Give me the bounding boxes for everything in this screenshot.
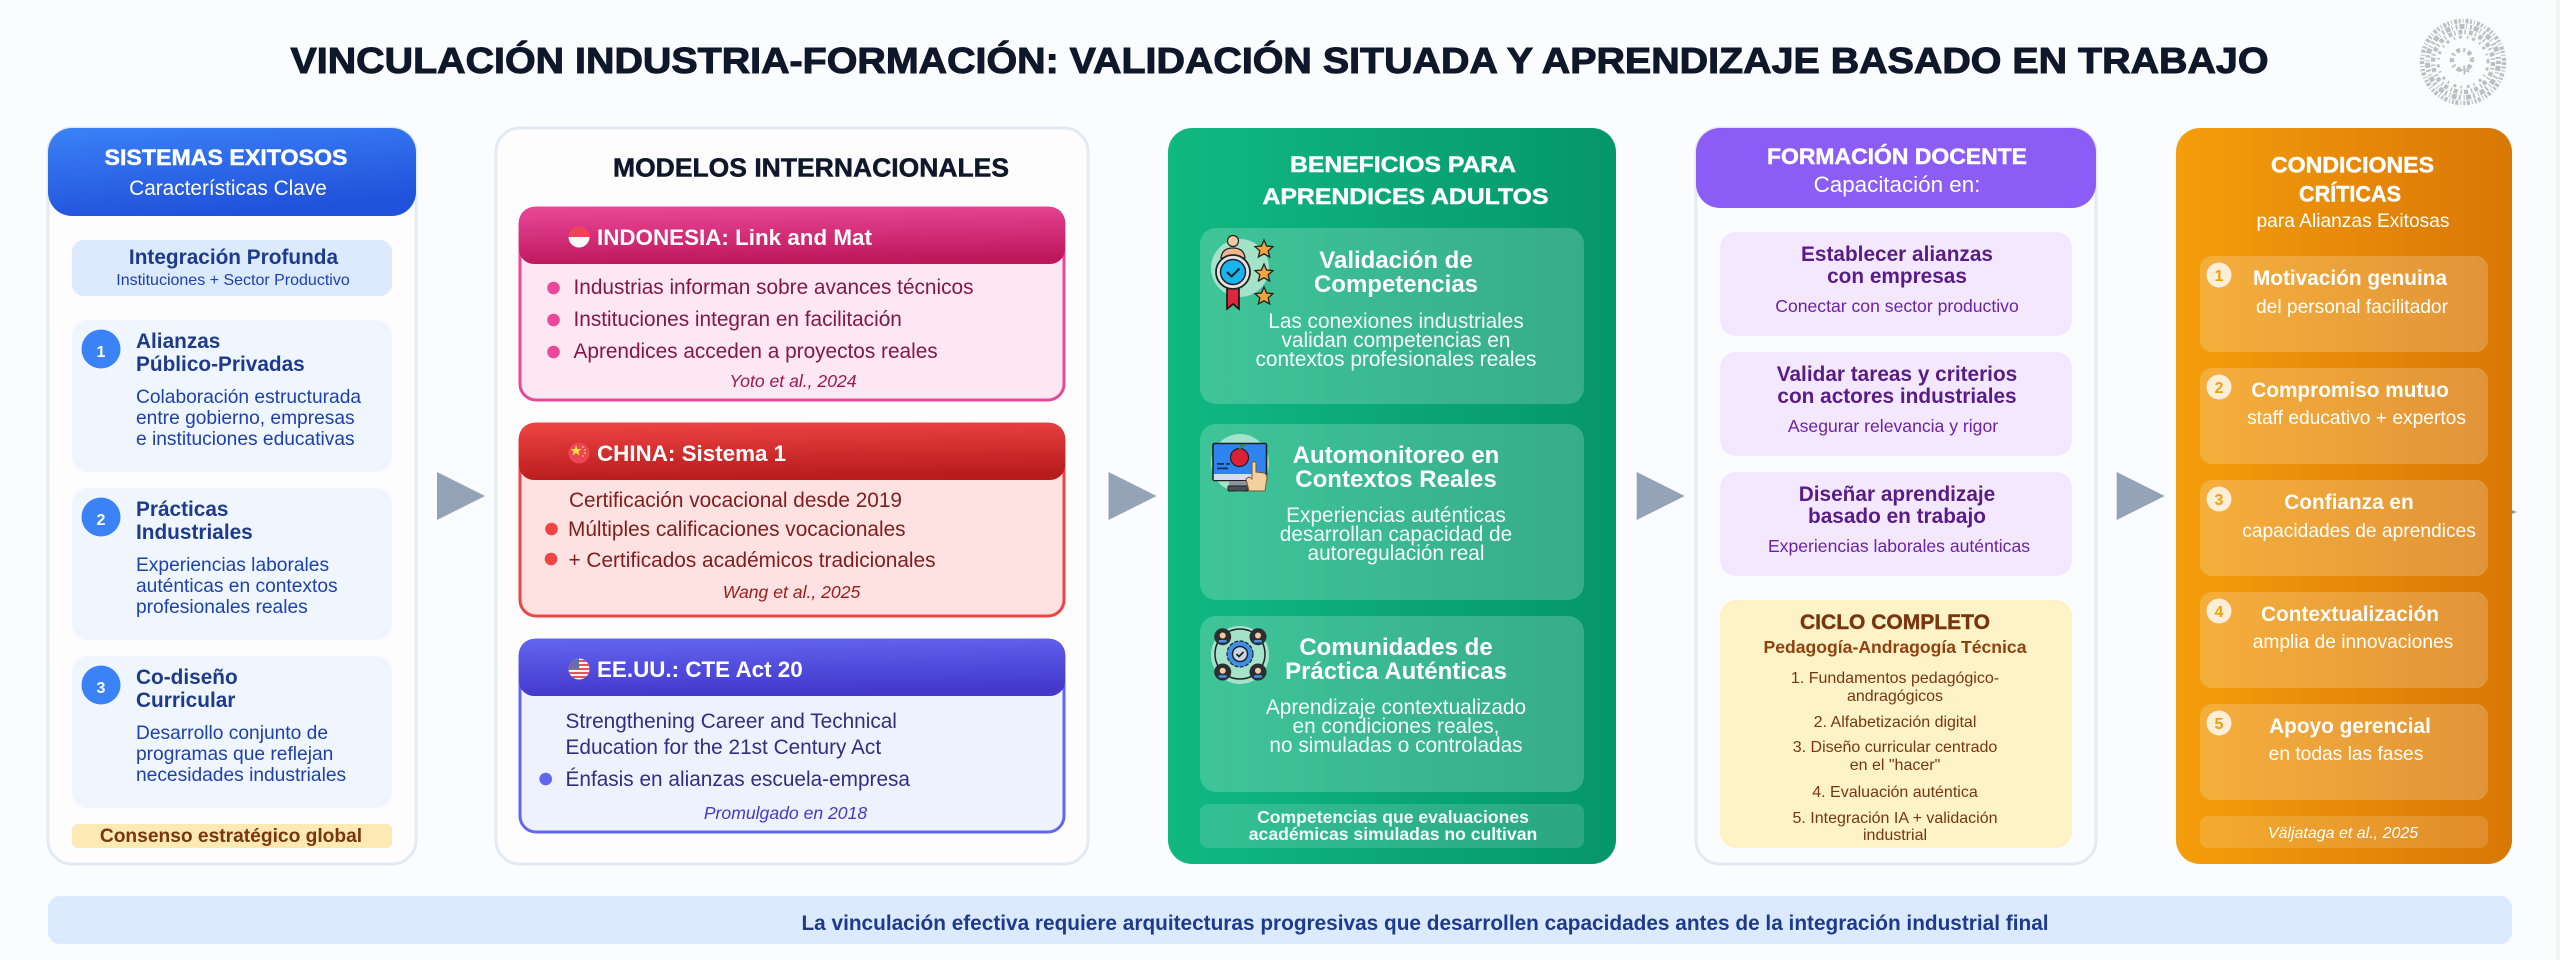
condition 5: Apoyo gerencial: [2269, 715, 2431, 738]
panel: modelos internacionales: [496, 128, 1088, 864]
card: validación: [1200, 228, 1584, 404]
note: competencias: Competencias que evaluaciones: [1257, 807, 1529, 827]
card: ciclo completo: industrial: [1863, 827, 1927, 844]
card: co-diseño: Co-diseño: [136, 666, 238, 689]
card: validar tareas: Asegurar relevancia y rigor: [1788, 416, 1998, 436]
panel header: Capacitación en:: [1814, 172, 1980, 197]
card: eeuu: [519, 639, 1065, 832]
card: automonitoreo: Automonitoreo en: [1293, 442, 1499, 469]
condition 3: capacidades de aprendices: [2242, 521, 2476, 542]
card: china: + Certificados académicos tradicionales: [568, 549, 936, 572]
card: ciclo completo: [1720, 600, 2072, 848]
heading: CRÍTICAS: [2299, 182, 2401, 206]
integración profunda: Integración Profunda: [129, 246, 339, 269]
card: validar tareas: con actores industriales: [1777, 385, 2017, 408]
card: china: Múltiples calificaciones vocacionales: [568, 518, 906, 541]
card: co-diseño: necesidades industriales: [136, 765, 346, 786]
card: alianzas: [72, 320, 392, 472]
card: validación: Validación de: [1319, 247, 1473, 274]
flag: usa: [568, 658, 590, 680]
footer banner: [48, 896, 2512, 944]
condition 1: 1: [2215, 268, 2224, 285]
panel header: SISTEMAS EXITOSOS: [104, 145, 348, 170]
heading: [1262, 152, 1549, 209]
card: validación: Las conexiones industriales: [1268, 310, 1524, 333]
card: validación: validan competencias en: [1282, 329, 1510, 352]
card: diseñar aprendizaje: [1720, 472, 2072, 576]
card: automonitoreo: Experiencias auténticas: [1286, 504, 1506, 527]
card: indonesia: Yoto et al., 2024: [729, 371, 857, 391]
flag: china: [568, 442, 590, 464]
card: alianzas: Colaboración estructurada: [136, 387, 361, 408]
card: validar tareas: [1720, 352, 2072, 456]
panel header: [1696, 128, 2096, 208]
title: VINCULACIÓN INDUSTRIA-FORMACIÓN: VALIDACIÓN SITUADA Y APRENDIZAJE BASADO EN TRABAJO: [290, 39, 2268, 81]
panel: beneficios: [1168, 128, 1616, 864]
card: comunidades: en condiciones reales,: [1293, 715, 1499, 738]
card: comunidades: no simuladas o controladas: [1269, 734, 1523, 757]
card: china: [519, 423, 1065, 616]
card: validación: Competencias: [1314, 271, 1478, 298]
card: automonitoreo: Contextos Reales: [1295, 466, 1497, 493]
condition 3: Confianza en: [2284, 491, 2414, 514]
condition 4: amplia de innovaciones: [2253, 632, 2453, 653]
panel: formación docente: [1696, 128, 2096, 864]
heading: para Alianzas Exitosas: [2256, 211, 2450, 232]
panel: sistemas exitosos: [48, 128, 416, 864]
card: eeuu: Énfasis en alianzas escuela-empresa: [566, 768, 910, 791]
icon: monitor with apple: [1211, 434, 1269, 492]
card: prácticas: profesionales reales: [136, 597, 308, 618]
condition 4: Contextualización: [2261, 603, 2439, 626]
consenso: Consenso estratégico global: [100, 826, 362, 847]
card: diseñar aprendizaje: Experiencias laborales auténticas: [1768, 536, 2030, 556]
card: alianzas: Alianzas: [136, 330, 220, 353]
card: automonitoreo: [1200, 424, 1584, 600]
card: china: CHINA: Sistema 1: [597, 441, 786, 466]
card: ciclo completo: en el "hacer": [1850, 757, 1940, 774]
card: prácticas: Prácticas: [136, 498, 228, 521]
card: ciclo completo: 1. Fundamentos pedagógico-: [1791, 670, 1999, 687]
condition 1: [2200, 256, 2488, 352]
card: indonesia: Instituciones integran en facilitación: [574, 308, 902, 331]
condition 3: 3: [2215, 492, 2224, 509]
card: prácticas: auténticas en contextos: [136, 576, 338, 597]
panel header: Características Clave: [129, 177, 327, 200]
card: ciclo completo: 4. Evaluación auténtica: [1812, 784, 1978, 801]
note: competencias: [1200, 804, 1584, 848]
card: validar tareas: Validar tareas y criterios: [1777, 363, 2017, 386]
card: alianzas: 1: [97, 344, 106, 361]
heading: [2256, 152, 2450, 232]
integración profunda: Instituciones + Sector Productivo: [116, 272, 350, 289]
panel header: [48, 128, 416, 216]
panel: condiciones críticas: [2176, 128, 2512, 864]
card: eeuu: Promulgado en 2018: [704, 803, 867, 823]
card: indonesia: INDONESIA: Link and Mat: [597, 225, 872, 250]
condition 3: [2200, 480, 2488, 576]
card: comunidades: Aprendizaje contextualizado: [1266, 696, 1526, 719]
card: eeuu: Strengthening Career and Technical: [566, 710, 897, 733]
card: ciclo completo: andragógicos: [1847, 688, 1943, 705]
card: prácticas: [72, 488, 392, 640]
card: diseñar aprendizaje: basado en trabajo: [1808, 505, 1986, 528]
condition 5: 5: [2215, 716, 2224, 733]
condition 5: en todas las fases: [2269, 744, 2423, 765]
card: eeuu: EE.UU.: CTE Act 20: [597, 657, 803, 682]
citation: [2200, 816, 2488, 848]
condition 2: [2200, 368, 2488, 464]
card: alianzas: e instituciones educativas: [136, 429, 355, 450]
card: prácticas: 2: [97, 512, 106, 529]
card: ciclo completo: 5. Integración IA + validación: [1792, 810, 1998, 827]
condition 2: Compromiso mutuo: [2251, 379, 2449, 402]
card: prácticas: Industriales: [136, 521, 253, 544]
condition 2: 2: [2215, 380, 2224, 397]
citation: Väljataga et al., 2025: [2268, 825, 2418, 842]
card: indonesia: Aprendices acceden a proyectos reales: [574, 340, 938, 363]
footer banner: La vinculación efectiva requiere arquitecturas progresivas que desarrollen capacidades antes de la integración industrial final: [801, 912, 2049, 935]
card: alianzas con empresas: Conectar con sector productivo: [1775, 296, 2019, 316]
card: validación: contextos profesionales reales: [1256, 348, 1536, 371]
card: indonesia: Industrias informan sobre avances técnicos: [574, 276, 973, 299]
condition 4: [2200, 592, 2488, 688]
condition 2: staff educativo + expertos: [2247, 408, 2466, 429]
arrow 4: [2117, 472, 2165, 520]
card: china: Wang et al., 2025: [723, 582, 861, 602]
card: co-diseño: [72, 656, 392, 808]
card: alianzas: Público-Privadas: [136, 353, 305, 376]
card: alianzas con empresas: Establecer alianzas: [1801, 243, 1993, 266]
card: ciclo completo: 2. Alfabetización digital: [1814, 714, 1976, 731]
card: indonesia: [519, 207, 1065, 400]
card: co-diseño: Curricular: [136, 689, 235, 712]
card: alianzas con empresas: [1720, 232, 2072, 336]
icon: watermark seal: [2422, 21, 2504, 103]
arrow 1: [437, 472, 485, 520]
card: alianzas: entre gobierno, empresas: [136, 408, 355, 429]
card: comunidades: Comunidades de: [1299, 634, 1493, 661]
card: ciclo completo: CICLO COMPLETO: [1800, 611, 1990, 634]
card: comunidades: [1200, 616, 1584, 792]
condition 1: del personal facilitador: [2256, 297, 2449, 318]
card: prácticas: Experiencias laborales: [136, 555, 329, 576]
card: automonitoreo: autoregulación real: [1308, 542, 1484, 565]
panel header: FORMACIÓN DOCENTE: [1767, 144, 2027, 169]
card: automonitoreo: desarrollan capacidad de: [1280, 523, 1512, 546]
card: co-diseño: Desarrollo conjunto de: [136, 723, 328, 744]
integración profunda: [72, 240, 392, 296]
condition 5: [2200, 704, 2488, 800]
card: eeuu: Education for the 21st Century Act: [566, 736, 881, 759]
card: china: Certificación vocacional desde 2019: [569, 489, 902, 512]
condition 4: 4: [2215, 604, 2224, 621]
icon: medal and stars: [1211, 236, 1273, 309]
arrow 3: [1637, 472, 1685, 520]
card: ciclo completo: Pedagogía-Andragogía Técnica: [1764, 637, 2027, 657]
note: competencias: académicas simuladas no cultivan: [1249, 824, 1537, 844]
card: co-diseño: 3: [97, 680, 106, 697]
heading: MODELOS INTERNACIONALES: [613, 154, 1009, 182]
icon: community network: [1211, 626, 1269, 684]
heading: CONDICIONES: [2271, 152, 2434, 178]
card: co-diseño: programas que reflejan: [136, 744, 333, 765]
card: alianzas con empresas: con empresas: [1827, 265, 1967, 288]
condition 1: Motivación genuina: [2253, 267, 2447, 290]
flag: indonesia: [568, 226, 590, 248]
heading: BENEFICIOS PARA: [1290, 152, 1516, 177]
card: ciclo completo: 3. Diseño curricular centrado: [1793, 739, 1997, 756]
heading: APRENDICES ADULTOS: [1262, 184, 1549, 209]
card: comunidades: Práctica Auténticas: [1285, 658, 1507, 685]
card: diseñar aprendizaje: Diseñar aprendizaje: [1799, 483, 1995, 506]
arrow 2: [1108, 472, 1156, 520]
